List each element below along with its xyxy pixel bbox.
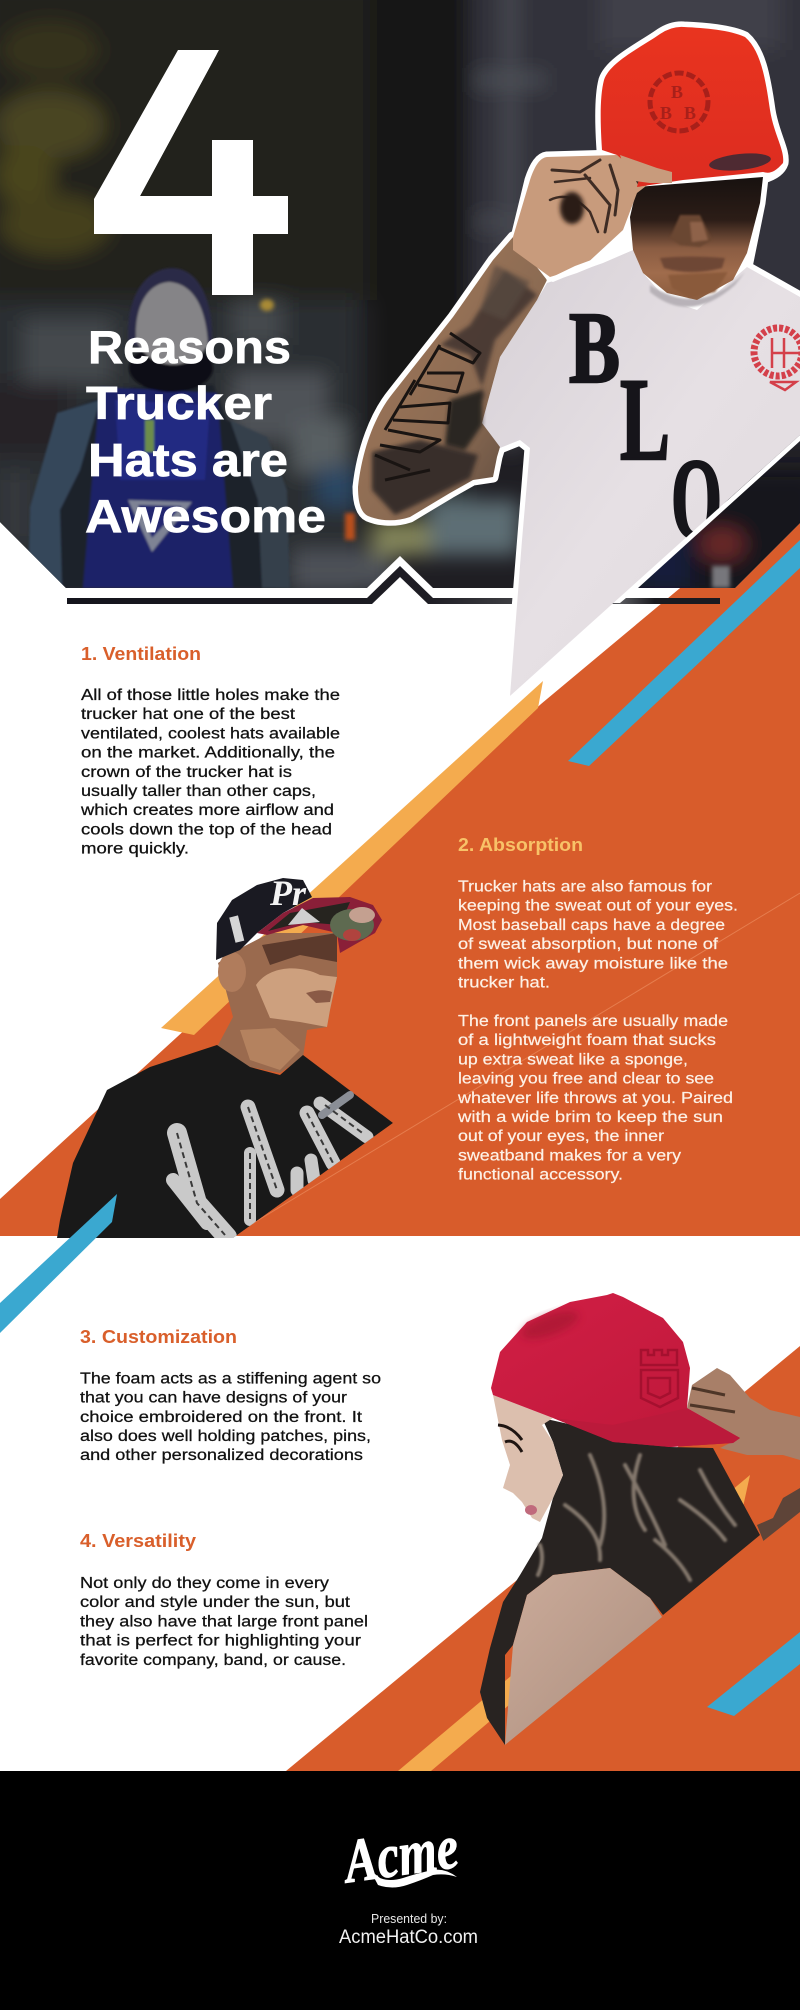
- arm tattoo lines: [375, 333, 480, 480]
- blurred street scene: [0, 0, 800, 600]
- text block: ventilation: usually taller than other caps,: [81, 783, 316, 800]
- shirt letters: B: [569, 292, 620, 405]
- text block: versatility: Not only do they come in every: [80, 1575, 329, 1592]
- text block: absorption: sweatband makes for a very: [458, 1147, 681, 1164]
- cap logo: [641, 1350, 678, 1407]
- text block: absorption: out of your eyes, the inner: [458, 1128, 664, 1145]
- cap brim: [257, 897, 382, 953]
- face: [493, 1395, 563, 1522]
- neck light: [240, 1028, 300, 1070]
- text block: customization: that you can have designs of your: [80, 1390, 347, 1407]
- text block: ventilation: cools down the top of the head: [81, 821, 332, 838]
- white diagonal line: [600, 435, 800, 603]
- cap patch: [229, 915, 244, 943]
- torn white edge under hand: [546, 233, 633, 282]
- thumb over brim: [620, 155, 672, 183]
- hair highlights: [538, 1455, 735, 1580]
- arm: [358, 237, 547, 520]
- cap logo: Pr: [269, 873, 307, 913]
- cap crest: B: [684, 103, 696, 123]
- text block: ventilation: ventilated, coolest hats available: [81, 725, 340, 742]
- text block: absorption: up extra sweat like a sponge,: [458, 1051, 688, 1068]
- eye: [498, 1425, 522, 1452]
- person with backpack: [27, 268, 290, 588]
- text block: absorption: Most baseball caps have a degree: [458, 917, 725, 934]
- text block: ventilation: which creates more airflow and: [80, 802, 334, 819]
- heading: 1. Ventilation: 1. Ventilation: [81, 643, 201, 664]
- cap crown: [216, 878, 312, 960]
- photo: man in black tee: [57, 873, 393, 1238]
- text block: ventilation: [80, 687, 340, 858]
- cap crest: [650, 73, 708, 131]
- divider: chevron band: [66, 556, 720, 604]
- cap brim shade: [553, 1408, 740, 1447]
- text block: absorption: [457, 878, 738, 1184]
- photo: woman with crimson cap: [480, 1293, 800, 1745]
- text: presented by: Presented by:: [371, 1911, 447, 1926]
- panel: orange diagonal section 1: [0, 523, 800, 1236]
- faint line across orange: [232, 893, 800, 1236]
- text block: absorption: leaving you free and clear to see: [458, 1071, 714, 1088]
- text block: ventilation: trucker hat one of the best: [81, 706, 296, 723]
- text block: ventilation: All of those little holes make the: [81, 687, 340, 704]
- text block: customization: and other personalized decorations: [80, 1447, 363, 1464]
- fingers: [690, 1388, 735, 1412]
- text block: customization: [80, 1370, 381, 1464]
- logo: Acme: Acme: [337, 1813, 462, 1897]
- heading: 4. Versatility: 4. Versatility: [80, 1530, 197, 1551]
- heading: title: Hats are: [88, 434, 288, 486]
- stripe: blue lower right: [707, 1632, 800, 1716]
- face: [630, 177, 763, 300]
- far arm: [757, 1488, 800, 1545]
- text block: absorption: keeping the sweat out of your eyes.: [458, 898, 738, 915]
- text block: absorption: whatever life throws at you. Paired: [457, 1090, 733, 1107]
- text block: versatility: that is perfect for highlighting your: [80, 1633, 361, 1650]
- photo: man with red cap: [358, 27, 800, 696]
- lit face area: [256, 968, 337, 1027]
- text block: absorption: of a lightweight foam that sucks: [458, 1032, 716, 1049]
- stripe: yellow lower: [398, 1475, 750, 1771]
- text block: absorption: The front panels are usually made: [458, 1013, 728, 1030]
- lips: [306, 990, 332, 1003]
- cap crest: B: [660, 103, 672, 123]
- text block: absorption: with a wide brim to keep the sun: [457, 1109, 723, 1126]
- print cracks: [177, 1105, 365, 1235]
- text block: absorption: Trucker hats are also famous for: [458, 878, 712, 896]
- hair: [480, 1418, 760, 1745]
- stripe: yellow upper: [161, 681, 543, 1035]
- text block: absorption: them wick away moisture like the: [458, 955, 728, 972]
- small lights and cone: [260, 299, 730, 588]
- nose and mouth: [660, 215, 728, 298]
- cap crest: B: [671, 82, 683, 102]
- arm tattoos shading: [372, 265, 537, 515]
- text block: customization: choice embroidered on the front. It: [80, 1409, 363, 1426]
- hand creases and finger tattoos: [550, 160, 640, 232]
- text block: ventilation: on the market. Additionally, the: [81, 745, 335, 762]
- forehead shadow: [262, 933, 337, 965]
- text block: ventilation: crown of the trucker hat is: [81, 764, 292, 781]
- brim pattern: [268, 902, 375, 941]
- text block: versatility: [80, 1575, 368, 1669]
- head and neck: [217, 933, 337, 1073]
- white cut-out outline: [352, 21, 800, 604]
- text block: ventilation: more quickly.: [81, 841, 189, 858]
- text block: customization: also does well holding patches, pins,: [80, 1428, 371, 1445]
- text block: absorption: trucker hat.: [458, 974, 550, 992]
- cap: [601, 27, 783, 187]
- shirt letters: O: [671, 436, 722, 564]
- back: [505, 1568, 662, 1745]
- hand: [513, 155, 647, 277]
- text block: versatility: they also have that large front panel: [80, 1613, 368, 1630]
- heading: 2. Absorption: 2. Absorption: [458, 834, 583, 855]
- text block: versatility: color and style under the sun, but: [80, 1594, 351, 1611]
- stripe: blue upper: [568, 540, 800, 766]
- cap: [491, 1293, 740, 1447]
- heading: title: Trucker: [86, 377, 272, 429]
- heading: title: Awesome: [85, 490, 326, 542]
- text: website: AcmeHatCo.com: [339, 1927, 478, 1948]
- shirt letters: L: [620, 354, 670, 485]
- hand: [687, 1368, 800, 1460]
- ear: [218, 952, 246, 992]
- text block: absorption: of sweat absorption, but none of: [458, 936, 719, 953]
- shirt collar shadow: [650, 272, 745, 307]
- t-shirt: [57, 1045, 393, 1238]
- panel: footer: [0, 1771, 800, 2010]
- heading: title: Reasons: [88, 321, 291, 373]
- panel: orange diagonal section 2: [286, 1346, 800, 1771]
- text block: customization: The foam acts as a stiffening agent so: [80, 1370, 381, 1387]
- hand shadow: [560, 192, 584, 224]
- stripe: blue lower left: [0, 1194, 117, 1333]
- heading: title: [85, 321, 326, 542]
- lips: [525, 1505, 537, 1515]
- shirt letters: [569, 314, 720, 538]
- shirt crest: [754, 328, 800, 390]
- shirt: [482, 250, 800, 696]
- text block: versatility: favorite company, band, or cause.: [80, 1652, 346, 1669]
- under brim sticker: [709, 153, 771, 171]
- text block: absorption: functional accessory.: [458, 1167, 623, 1184]
- panel: hero photo: [0, 0, 800, 600]
- t-shirt print: [173, 1095, 367, 1237]
- cap top shading: [518, 1305, 582, 1345]
- heading: 3. Customization: 3. Customization: [80, 1326, 237, 1347]
